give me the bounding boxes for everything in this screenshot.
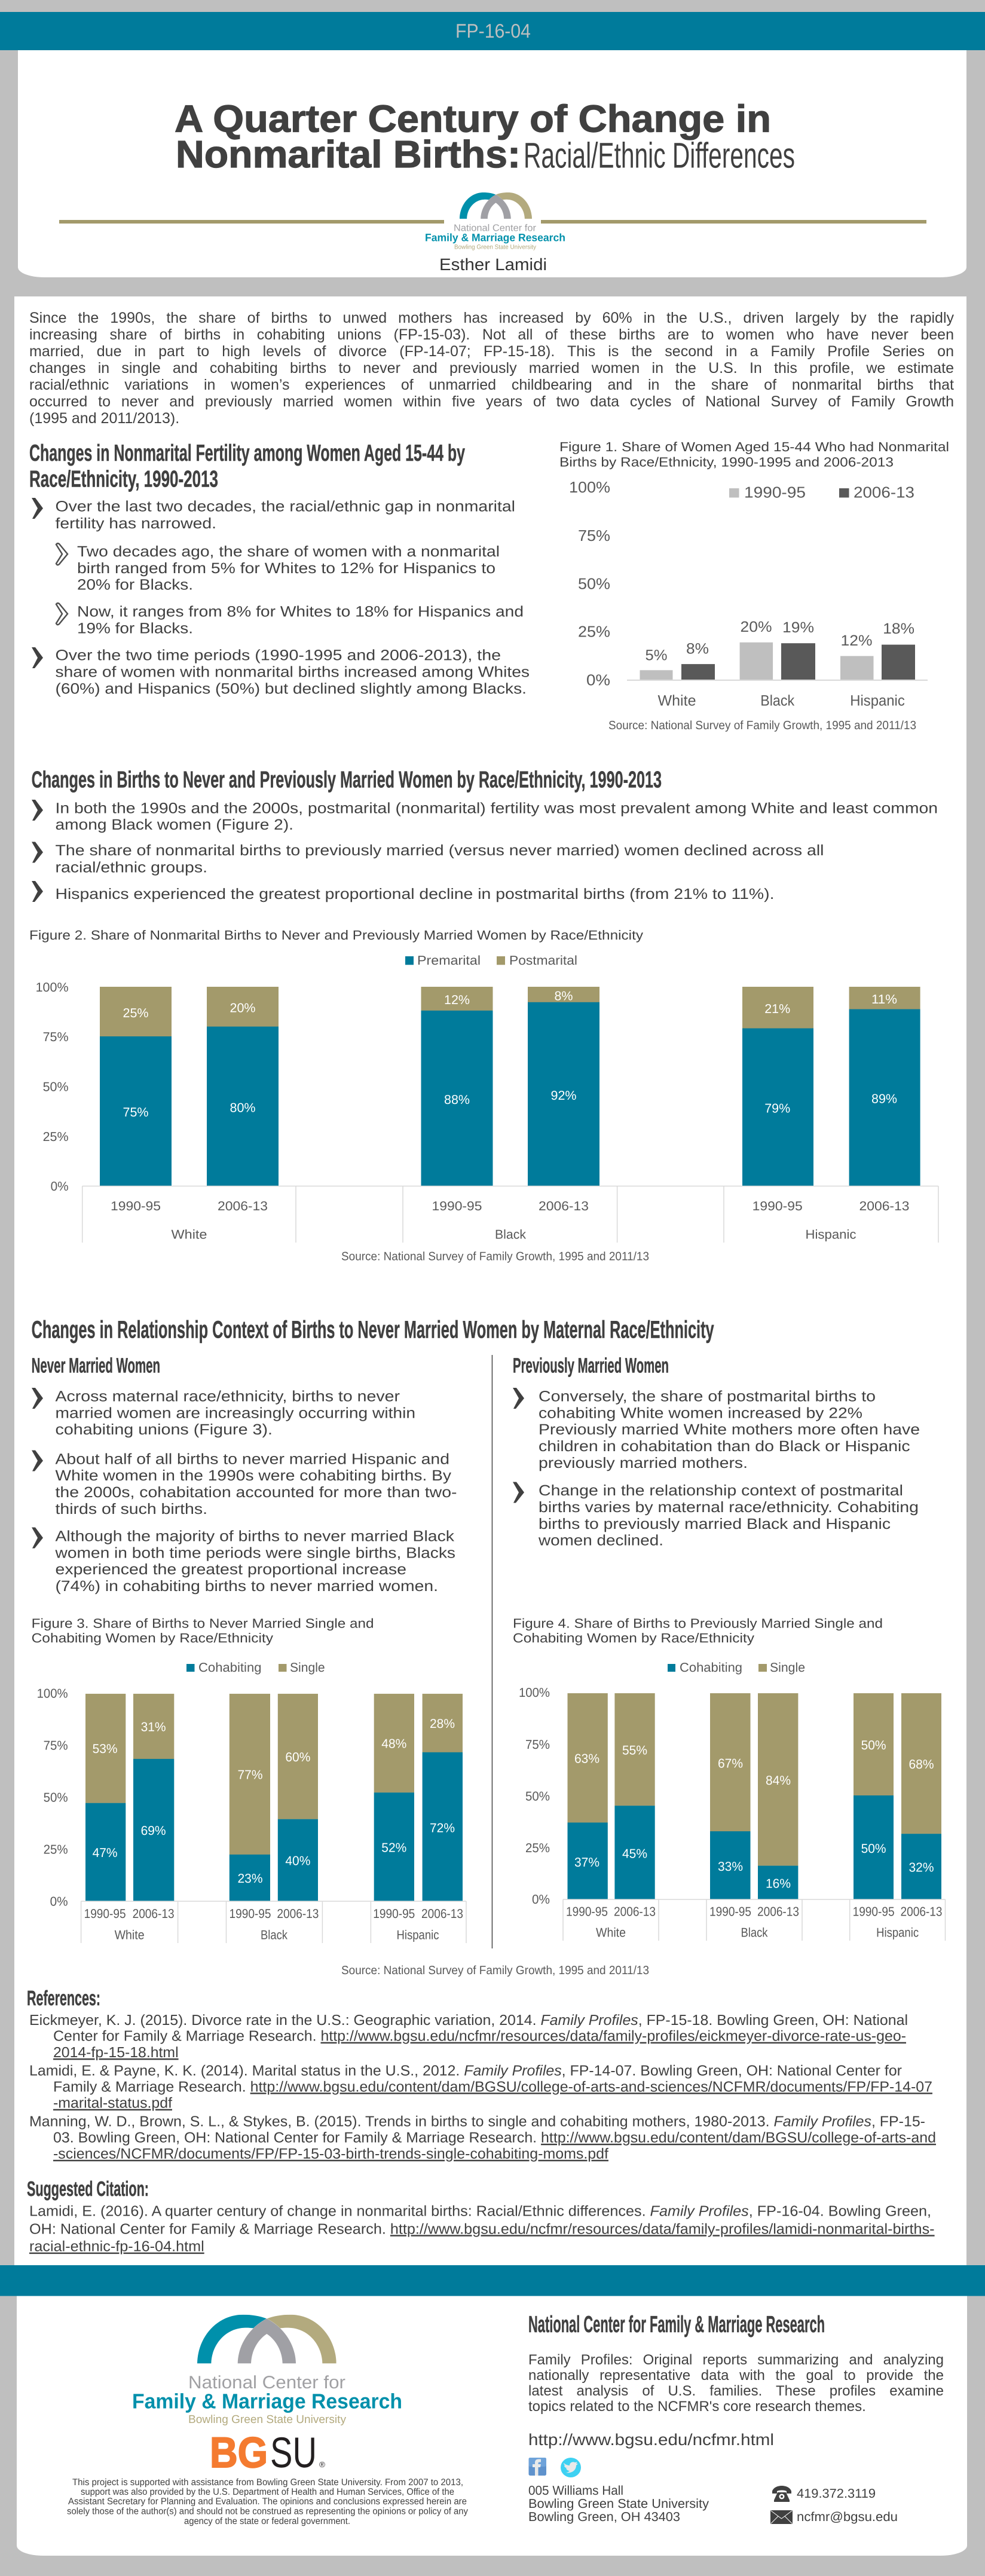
figure 3 title <box>32 1616 374 1645</box>
footer band <box>0 2265 985 2296</box>
y axis labels: 25% <box>578 623 610 641</box>
figure 1 title: Figure 1. Share of Women Aged 15-44 Who had Nonmarital <box>559 439 949 454</box>
value labels: 47% <box>93 1846 118 1860</box>
bullets: nonmarital fertility: share of women with nonmarital births increased among Whites <box>55 663 530 680</box>
icon: telephone <box>772 2486 791 2502</box>
y axis labels: 100% <box>519 1685 550 1700</box>
y axis labels: 100% <box>37 1686 68 1700</box>
value labels: 68% <box>908 1757 934 1772</box>
value labels: 77% <box>238 1767 263 1782</box>
intro paragraph: occurred to never and previously married women within five years of two data cycles of National Survey of Family Growth <box>29 393 954 410</box>
funding disclaimer: Assistant Secretary for Planning and Evaluation. The opinions and conclusions expressed herein are <box>68 2497 467 2507</box>
value labels: 45% <box>622 1847 647 1861</box>
value labels: 52% <box>381 1840 406 1855</box>
column: never married women: (74%) in cohabiting births to never married women. <box>55 1578 438 1595</box>
x axis: Black <box>741 1925 768 1939</box>
chevron bullet <box>32 1528 43 1548</box>
x axis: Black <box>261 1928 287 1942</box>
column: never married women: women in both time periods were single births, Blacks <box>54 1544 455 1561</box>
y axis labels <box>37 1686 68 1909</box>
x axis: 2006-13 <box>757 1905 799 1919</box>
intro paragraph: changes in single and cohabiting births to never and previously married women in the U.S. In this profile, we estimate <box>29 360 954 377</box>
x axis: 1990-95 <box>432 1199 482 1213</box>
chart: figure 2 stacked bars <box>36 953 938 1243</box>
column: never married women: White women in the 1990s were cohabiting births. By <box>55 1467 452 1484</box>
column: never married women: About half of all births to never married Hispanic and <box>55 1451 449 1467</box>
value labels: 37% <box>574 1855 599 1870</box>
footer description paragraph: nationally representative data with the goal to provide the <box>528 2367 944 2384</box>
bullets: never and previously married: Hispanics experienced the greatest proportional decline in postmarital births (from 21% to 11%). <box>55 886 775 902</box>
value labels: 79% <box>764 1102 790 1116</box>
bars <box>627 643 928 681</box>
value labels: 18% <box>883 620 914 637</box>
x axis: 2006-13 <box>277 1907 319 1921</box>
chevron bullet <box>513 1388 524 1409</box>
figure 3 title: Figure 3. Share of Births to Never Married Single and <box>32 1616 374 1630</box>
figure 1 source: Source: National Survey of Family Growth, 1995 and 2011/13 <box>608 719 916 732</box>
logo: NCFMR large: Bowling Green State University <box>188 2413 346 2426</box>
legend: Cohabiting <box>198 1660 262 1675</box>
bullets: never and previously married: In both the 1990s and the 2000s, postmarital (nonmarital) fertility was most prevalent among White and least common <box>55 800 938 816</box>
email: ncfmr@bgsu.edu <box>797 2510 898 2524</box>
value labels <box>574 1738 934 1890</box>
logo: BGSU <box>210 2429 325 2477</box>
value labels: 88% <box>444 1093 470 1107</box>
chevron bullet <box>513 1482 524 1503</box>
title: Nonmarital Births: <box>176 133 521 176</box>
icon: envelope <box>770 2510 793 2524</box>
x axis: 2006-13 <box>421 1907 463 1921</box>
legend: Single <box>770 1660 805 1675</box>
y axis labels: 100% <box>569 478 610 496</box>
references list: -sciences/NCFMR/documents/FP/FP-15-03-birth-trends-single-cohabiting-moms.pdf <box>53 2146 608 2162</box>
value labels: 20% <box>740 619 772 635</box>
value labels: 31% <box>141 1720 166 1734</box>
bars <box>85 1694 463 1901</box>
chart: figure 4 stacked bars <box>519 1660 946 1941</box>
y axis labels: 0% <box>50 1895 68 1909</box>
chevron bullet <box>32 800 43 821</box>
suggested citation text: Lamidi, E. (2016). A quarter century of change in nonmarital births: Racial/Ethnic differences. Family Profiles, FP-16-04. Bowling Green, <box>29 2203 931 2219</box>
value labels: 12% <box>444 993 470 1007</box>
website: http://www.bgsu.edu/ncfmr.html <box>528 2431 774 2449</box>
funding disclaimer: agency of the state or federal government. <box>184 2516 350 2526</box>
panel: title card <box>0 12 985 277</box>
suggested citation text: OH: National Center for Family & Marriage Research. http://www.bgsu.edu/ncfmr/resources/data/family-profiles/lamidi-nonmarital-births- <box>29 2221 935 2237</box>
intro paragraph: racial/ethnic variations in women’s experiences of unmarried childbearing and in the share of nonmarital births that <box>29 377 954 393</box>
y axis labels: 25% <box>43 1130 69 1144</box>
x axis: 1990-95 <box>566 1905 608 1919</box>
y axis labels: 50% <box>578 575 610 593</box>
column: never married women: cohabiting unions (Figure 3). <box>55 1421 273 1438</box>
funding disclaimer: This project is supported with assistance from Bowling Green State University. From 2007 to 2013, <box>72 2477 463 2488</box>
x axis: Hispanic <box>876 1925 919 1939</box>
references list: 2014-fp-15-18.html <box>53 2045 179 2061</box>
subheading: Previously Married Women <box>513 1354 669 1377</box>
figures 3 and 4 source: Source: National Survey of Family Growth, 1995 and 2011/13 <box>341 1964 649 1977</box>
icon: facebook <box>528 2458 546 2476</box>
x axis: 1990-95 <box>853 1905 895 1919</box>
subheading: Never Married Women <box>32 1354 160 1377</box>
column: previously married women: cohabiting White women increased by 22% <box>539 1405 862 1421</box>
bullets: nonmarital fertility: birth ranged from 5% for Whites to 12% for Hispanics to <box>77 560 495 577</box>
column: never married women: thirds of such births. <box>55 1501 207 1518</box>
figure 3 title: Cohabiting Women by Race/Ethnicity <box>32 1630 273 1645</box>
bars <box>100 987 920 1186</box>
intro paragraph: Since the 1990s, the share of births to unwed mothers has increased by 60% in the U.S., driven largely by the rapidly <box>29 310 954 326</box>
column divider <box>492 1355 493 1948</box>
logo: BGSU: SU <box>270 2429 317 2477</box>
legend <box>729 483 914 501</box>
legend: 1990-95 <box>744 483 806 501</box>
value labels <box>646 619 914 663</box>
bullets: nonmarital fertility: Two decades ago, the share of women with a nonmarital <box>77 543 500 560</box>
suggested citation heading: Suggested Citation: <box>27 2177 149 2201</box>
author: Esther Lamidi <box>439 255 547 274</box>
logo: NCFMR small: National Center for <box>454 224 537 233</box>
y axis labels: 50% <box>43 1079 69 1094</box>
y axis labels: 25% <box>525 1841 550 1855</box>
x axis: Black <box>495 1227 526 1241</box>
x axis: 2006-13 <box>859 1199 910 1213</box>
chevron bullet <box>32 1388 43 1409</box>
value labels: 80% <box>230 1101 256 1115</box>
value labels: 19% <box>782 619 814 636</box>
column: never married women: married women are increasingly occurring within <box>55 1405 415 1421</box>
value labels: 25% <box>123 1006 148 1020</box>
y axis labels <box>36 980 69 1194</box>
y axis labels: 50% <box>525 1789 550 1804</box>
column: never married women: the 2000s, cohabitation accounted for more than two- <box>55 1484 457 1501</box>
value labels <box>93 1717 455 1886</box>
column: previously married women: women declined. <box>538 1532 663 1549</box>
postal address: 005 Williams Hall <box>528 2483 623 2498</box>
value labels: 75% <box>123 1105 148 1119</box>
column: previously married women: Change in the relationship context of postmarital <box>539 1482 903 1499</box>
figure 4 title <box>513 1616 883 1645</box>
figure 4 title: Cohabiting Women by Race/Ethnicity <box>513 1630 754 1645</box>
y axis labels: 75% <box>43 1030 69 1044</box>
value labels: 69% <box>141 1824 166 1838</box>
x axis <box>82 1186 938 1243</box>
column: previously married women: children in cohabitation than do Black or Hispanic <box>539 1438 910 1455</box>
value labels: 48% <box>381 1737 406 1751</box>
footer description paragraph: latest analysis of U.S. families. These profiles examine <box>528 2383 944 2399</box>
x axis: 2006-13 <box>133 1907 175 1921</box>
bullets: never and previously married: The share of nonmarital births to previously married (versus never married) women declined across all <box>55 842 824 859</box>
value labels: 72% <box>430 1821 455 1835</box>
bullets: nonmarital fertility: Over the two time periods (1990-1995 and 2006-2013), the <box>55 647 501 663</box>
value labels: 63% <box>574 1751 599 1766</box>
column: previously married women <box>513 1354 920 1549</box>
title <box>175 97 795 176</box>
value labels: 50% <box>861 1738 886 1752</box>
legend: Premarital <box>417 953 481 968</box>
legend <box>668 1660 805 1675</box>
bullets: never and previously married: among Black women (Figure 2). <box>55 816 293 833</box>
bullets: never and previously married: racial/ethnic groups. <box>55 859 207 876</box>
x axis <box>563 1899 946 1941</box>
chart: figure 3 stacked bars <box>37 1660 466 1943</box>
value labels: 53% <box>93 1742 118 1756</box>
y axis labels: 75% <box>44 1738 68 1752</box>
column: never married women: experienced the greatest proportional increase <box>55 1561 406 1578</box>
category labels: Black <box>760 692 795 709</box>
logo: BGSU: BG <box>210 2429 268 2477</box>
logo: NCFMR large <box>132 2315 402 2426</box>
value labels: 60% <box>285 1750 310 1764</box>
chevron bullet <box>32 498 43 519</box>
logo: NCFMR small: Family & Marriage Research <box>425 232 565 244</box>
x axis: 1990-95 <box>111 1199 161 1213</box>
value labels: 32% <box>908 1860 934 1874</box>
value labels: 21% <box>764 1002 790 1016</box>
value labels: 11% <box>871 992 897 1006</box>
value labels: 40% <box>285 1853 310 1868</box>
logo: NCFMR large: Family & Marriage Research <box>132 2390 402 2413</box>
figure 1 title <box>559 439 949 470</box>
x axis: 1990-95 <box>373 1907 415 1921</box>
funding disclaimer: solely those of the author(s) and should not be construed as representing the opinions or policy of any <box>67 2507 468 2517</box>
chevron bullet <box>32 1450 43 1471</box>
value labels: 89% <box>871 1092 897 1106</box>
logo: BGSU: ® <box>319 2460 325 2469</box>
intro paragraph: (1995 and 2011/2013). <box>29 410 179 427</box>
title rule <box>59 220 926 224</box>
intro paragraph: married, due in part to high levels of divorce (FP-14-07; FP-15-18). This is the second in a Family Profile Series on <box>29 343 954 360</box>
y axis labels: 100% <box>36 980 69 995</box>
panel: footer card <box>17 2296 967 2556</box>
funding disclaimer <box>67 2477 468 2526</box>
column: previously married women: previously married mothers. <box>539 1455 748 1471</box>
category labels: White <box>657 692 696 709</box>
funding disclaimer: support was also provided by the U.S. Department of Health and Human Services, Office of the <box>81 2487 454 2497</box>
section: never and previously married heading: Changes in Births to Never and Previously Married Women by Race/Ethnicity, 1990-2013 <box>32 767 662 793</box>
value labels: 33% <box>718 1859 743 1874</box>
figure 2 title: Figure 2. Share of Nonmarital Births to Never and Previously Married Women by Race/Ethnicity <box>29 928 643 943</box>
figure 4 title: Figure 4. Share of Births to Previously Married Single and <box>513 1616 883 1630</box>
x axis: White <box>171 1227 207 1241</box>
x axis: 2006-13 <box>218 1199 268 1213</box>
category labels <box>657 692 905 709</box>
logo: NCFMR large: National Center for <box>188 2373 345 2393</box>
legend <box>405 953 577 968</box>
column: never married women: Although the majority of births to never married Black <box>55 1528 455 1545</box>
footer description paragraph <box>528 2352 944 2415</box>
bullets: nonmarital fertility: 20% for Blacks. <box>77 576 193 593</box>
column: previously married women: Previously married White mothers more often have <box>539 1421 920 1438</box>
references list: Eickmeyer, K. J. (2015). Divorce rate in the U.S.: Geographic variation, 2014. Family Profiles, FP-15-18. Bowling Green, OH: National <box>29 2012 908 2029</box>
logo: NCFMR small <box>425 192 565 251</box>
references list: -marital-status.pdf <box>53 2095 172 2112</box>
references list: Lamidi, E. & Payne, K. K. (2014). Marital status in the U.S., 2012. Family Profiles, FP-14-07. Bowling Green, OH: National Center for <box>29 2063 902 2079</box>
column: previously married women: births to previously married Black and Hispanic <box>539 1516 891 1532</box>
intro paragraph <box>29 310 954 427</box>
references list: 03. Bowling Green, OH: National Center for Family & Marriage Research. http://www.bgsu.edu/content/dam/BGSU/college-of-arts-and <box>53 2130 936 2146</box>
value labels: 8% <box>686 641 709 657</box>
value labels: 28% <box>430 1717 455 1731</box>
phone number: 419.372.3119 <box>797 2486 876 2501</box>
references heading: References: <box>27 1987 100 2010</box>
bullets: nonmarital fertility: Now, it ranges from 8% for Whites to 18% for Hispanics and <box>77 604 524 620</box>
x axis: 2006-13 <box>614 1905 656 1919</box>
bullets: nonmarital fertility: (60%) and Hispanics (50%) but declined slightly among Blacks. <box>55 680 527 697</box>
x axis: 1990-95 <box>709 1905 751 1919</box>
category labels: Hispanic <box>850 692 905 709</box>
value labels: 20% <box>230 1001 256 1015</box>
y axis labels: 50% <box>44 1791 68 1805</box>
y axis labels <box>519 1685 550 1907</box>
y axis labels: 25% <box>44 1843 68 1857</box>
x axis: Hispanic <box>806 1227 856 1241</box>
value labels: 8% <box>555 989 573 1003</box>
legend: 2006-13 <box>854 483 914 501</box>
logo: NCFMR small: Bowling Green State University <box>454 244 537 251</box>
y axis labels: 75% <box>578 527 610 544</box>
legend: Cohabiting <box>680 1660 742 1675</box>
title: Racial/Ethnic Differences <box>524 135 795 176</box>
y axis labels: 0% <box>586 671 610 689</box>
bullets: nonmarital fertility: fertility has narrowed. <box>55 515 216 532</box>
column: previously married women: births varies by maternal race/ethnicity. Cohabiting <box>539 1499 919 1516</box>
bullets: never and previously married <box>32 800 938 902</box>
legend <box>186 1660 325 1675</box>
suggested citation text: racial-ethnic-fp-16-04.html <box>29 2239 204 2255</box>
bullets: nonmarital fertility: Over the last two decades, the racial/ethnic gap in nonmarital <box>55 498 515 515</box>
chevron bullet <box>32 842 43 863</box>
value labels: 12% <box>840 632 873 649</box>
y axis labels: 75% <box>525 1737 550 1752</box>
bullets: nonmarital fertility: 19% for Blacks. <box>77 620 193 637</box>
double chevron bullet <box>56 543 68 565</box>
postal address <box>528 2483 709 2524</box>
value labels: 23% <box>238 1871 263 1886</box>
references list <box>29 2012 936 2162</box>
footer description paragraph: topics related to the NCFMR's core research themes. <box>528 2398 866 2415</box>
section: nonmarital fertility heading <box>29 440 465 492</box>
section: nonmarital fertility heading: Changes in Nonmarital Fertility among Women Aged 15-44 by <box>29 440 465 466</box>
postal address: Bowling Green, OH 43403 <box>528 2510 680 2524</box>
references list: Family & Marriage Research. http://www.bgsu.edu/content/dam/BGSU/college-of-arts-and-sciences/NCFMR/documents/FP/FP-14-07 <box>53 2079 932 2095</box>
suggested citation text <box>29 2203 935 2255</box>
value labels <box>123 989 897 1119</box>
value labels: 50% <box>861 1841 886 1856</box>
bullets: nonmarital fertility <box>32 498 530 697</box>
icon: twitter <box>561 2458 581 2477</box>
x axis: 2006-13 <box>539 1199 589 1213</box>
value labels: 92% <box>551 1088 576 1103</box>
x axis <box>81 1901 466 1943</box>
postal address: Bowling Green State University <box>528 2497 709 2511</box>
references list: Center for Family & Marriage Research. http://www.bgsu.edu/ncfmr/resources/data/family-profiles/eickmeyer-divorce-rate-us-geo- <box>53 2029 906 2045</box>
x axis: Hispanic <box>397 1928 439 1942</box>
intro paragraph: increasing share of births in cohabiting unions (FP-15-03). Not all of these births are to women who have never been <box>29 326 954 343</box>
references list: Manning, W. D., Brown, S. L., & Stykes, B. (2015). Trends in births to single and cohabiting mothers, 1980-2013. Family Profiles, FP-15- <box>29 2113 925 2130</box>
chevron bullet <box>32 647 43 668</box>
header band <box>0 12 985 50</box>
value labels: 5% <box>646 647 667 663</box>
double chevron bullet <box>56 603 68 625</box>
y axis labels <box>569 478 610 689</box>
x axis: 1990-95 <box>230 1907 271 1921</box>
figure 1 title: Births by Race/Ethnicity, 1990-1995 and 2006-2013 <box>559 454 894 470</box>
value labels: 84% <box>766 1773 791 1788</box>
legend: Postmarital <box>509 953 577 968</box>
x axis: 1990-95 <box>84 1907 126 1921</box>
column: previously married women: Conversely, the share of postmarital births to <box>539 1388 876 1405</box>
column: never married women: Across maternal race/ethnicity, births to never <box>55 1388 400 1405</box>
bars <box>568 1693 941 1899</box>
x axis: White <box>115 1928 145 1942</box>
title: A Quarter Century of Change in <box>175 97 771 140</box>
footer description paragraph: Family Profiles: Original reports summarizing and analyzing <box>528 2352 944 2368</box>
y axis labels: 0% <box>51 1179 69 1194</box>
column: never married women <box>32 1354 457 1595</box>
x axis: White <box>596 1925 626 1939</box>
panel: main content background <box>14 296 966 2265</box>
chart: figure 1 bars <box>569 478 928 709</box>
chevron bullet <box>32 881 43 902</box>
x axis: 2006-13 <box>900 1905 943 1919</box>
report number: FP-16-04 <box>455 20 531 42</box>
legend: Single <box>290 1660 325 1675</box>
section: nonmarital fertility heading: Race/Ethnicity, 1990-2013 <box>29 466 218 492</box>
value labels: 55% <box>622 1743 647 1757</box>
x axis: 1990-95 <box>752 1199 803 1213</box>
value labels: 16% <box>766 1876 791 1890</box>
y axis labels: 0% <box>532 1892 550 1907</box>
figure 2 source: Source: National Survey of Family Growth, 1995 and 2011/13 <box>341 1250 649 1263</box>
value labels: 67% <box>718 1757 743 1771</box>
